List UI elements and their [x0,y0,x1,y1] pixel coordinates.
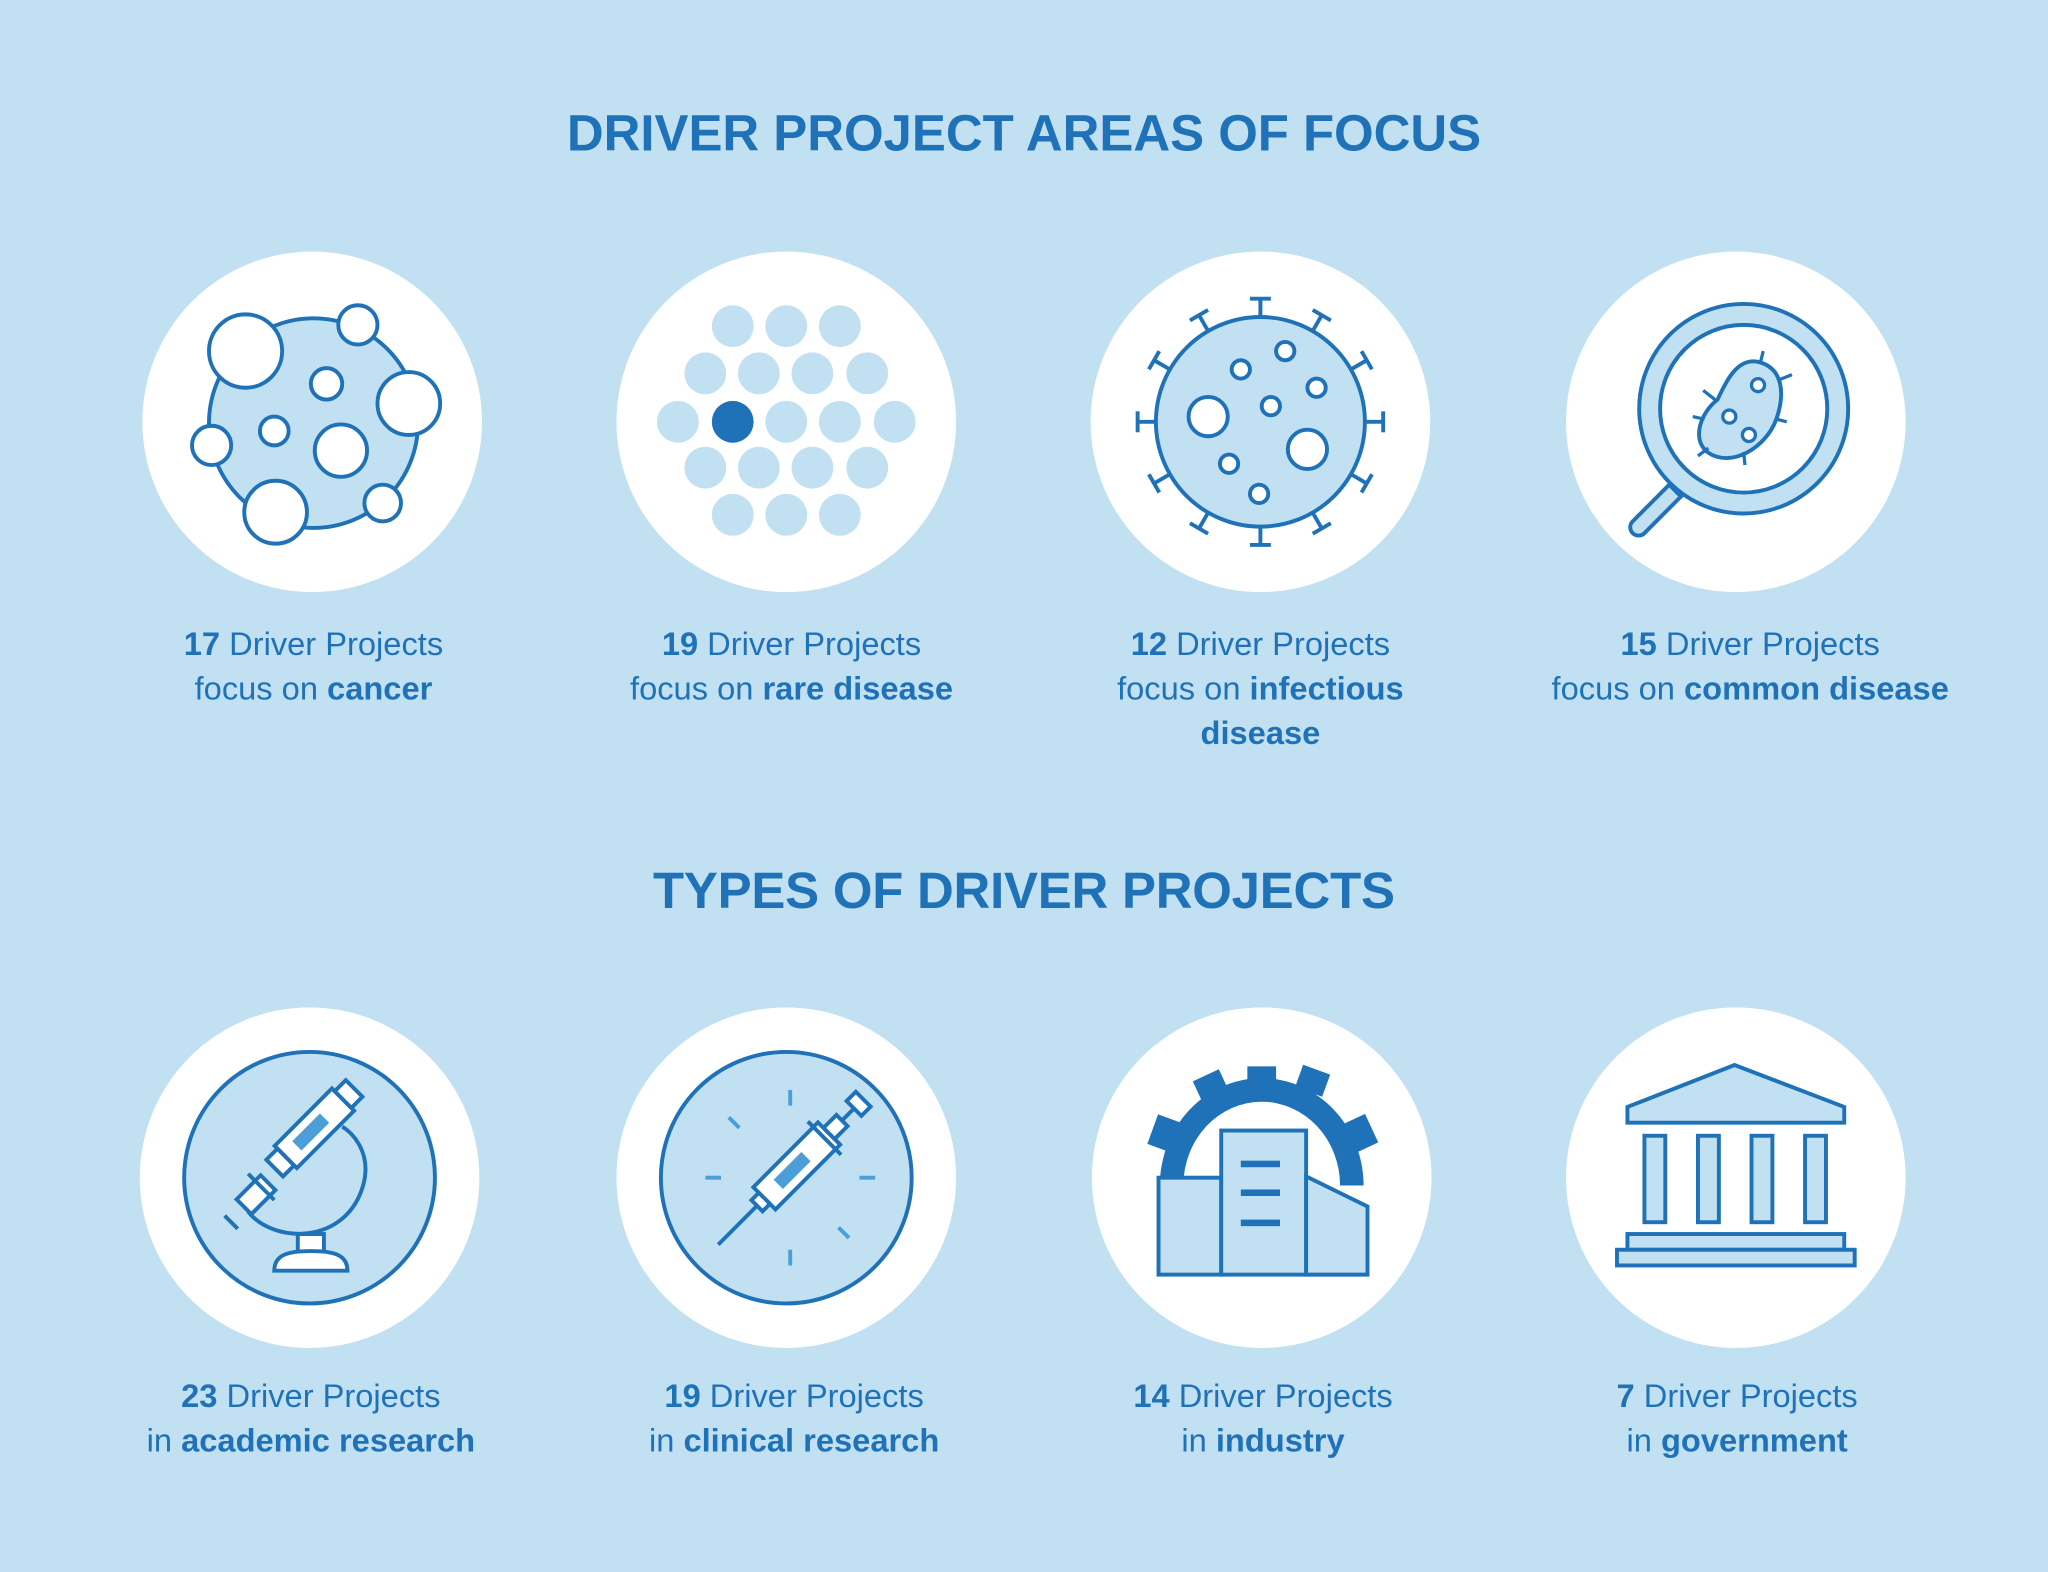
caption: rare disease: 19 Driver Projects [662,625,921,662]
icon: syringe [661,1052,912,1303]
caption: government: government [1661,1421,1848,1458]
caption: clinical research: clinical research [683,1421,939,1458]
caption: common disease: 15 Driver Projects [1621,625,1880,662]
caption: industry: in [1181,1421,1216,1458]
icon: government building [1617,1065,1855,1265]
icon: dot grid [657,305,916,536]
caption: industry: industry [1216,1421,1345,1458]
caption: infectious disease: focus on [1117,669,1250,707]
caption: government: 7 Driver Projects [1617,1377,1858,1414]
title: areas of focus: DRIVER PROJECT AREAS OF FOCUS [567,105,1481,162]
panel: industry [1092,1007,1432,1458]
caption: rare disease: rare disease [762,669,953,707]
panel: infectious disease [1091,252,1430,751]
caption: cancer: 17 Driver Projects [184,625,443,662]
panel: clinical research [616,1007,956,1458]
caption: academic research: academic research [181,1421,475,1458]
panel: rare disease [616,252,956,707]
caption: common disease: common disease [1684,669,1949,707]
icon: microscope [184,1052,435,1303]
caption: clinical research: in [649,1421,683,1458]
caption: government: in [1627,1421,1661,1458]
caption: cancer: cancer [327,669,433,707]
panel: academic research [140,1007,479,1458]
panel: cancer [142,252,482,707]
caption: rare disease: focus on [630,669,762,707]
caption: industry: 14 Driver Projects [1133,1377,1393,1414]
caption: clinical research: 19 Driver Projects [664,1377,924,1414]
caption: academic research: 23 Driver Projects [181,1377,441,1414]
icon: magnifier with bacterium [1630,304,1848,536]
caption: common disease: focus on [1552,669,1684,707]
title: types: TYPES OF DRIVER PROJECTS [653,862,1395,919]
caption: infectious disease: infectious [1250,669,1404,707]
caption: academic research: in [147,1421,181,1458]
icon: gear and buildings [1147,1065,1378,1275]
panel: government [1566,1007,1906,1458]
caption: cancer: focus on [195,669,327,707]
caption: infectious disease: 12 Driver Projects [1131,625,1390,662]
panel: common disease [1552,252,1949,707]
icon: virus [1138,299,1383,545]
caption: infectious disease: disease [1201,714,1320,751]
icon: cancer cell [192,305,440,544]
